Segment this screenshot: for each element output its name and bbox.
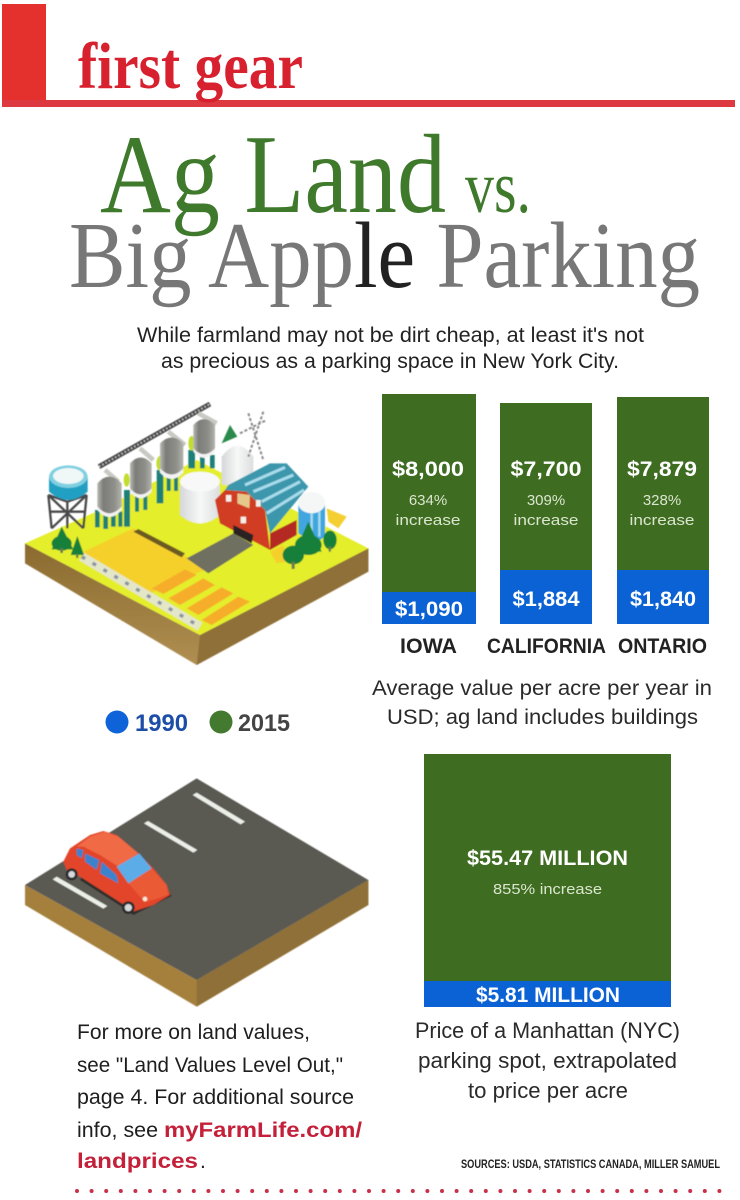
bar: Ontario: 328% [643, 492, 681, 509]
note: more on land values: landprices [77, 1150, 198, 1173]
legend item: 1990 [106, 710, 188, 737]
bar: Manhattan parking price [424, 754, 671, 1007]
intro text: While farmland may not be dirt cheap, at least it's not [137, 324, 644, 347]
legend item: 2015: 2015 [238, 710, 290, 737]
icon: communications tower [240, 412, 267, 460]
note: more on land values: info, see [77, 1119, 158, 1142]
gantry [99, 404, 210, 467]
icon: water tower [48, 465, 88, 528]
parking caption: parking spot, extrapolated [418, 1048, 677, 1073]
bar: Manhattan parking price: $5.81 MILLION [476, 984, 620, 1007]
note: more on land values: see "Land Values Level Out," [77, 1054, 343, 1077]
chart caption [372, 677, 712, 729]
note: more on land values: myFarmLife.com/ [164, 1119, 362, 1142]
bar: California: $1,884 [512, 588, 580, 611]
bar: Ontario: $7,879 [627, 458, 697, 481]
legend [106, 710, 290, 737]
bar: Iowa: 634% [409, 492, 447, 509]
illustration: parking lot with car [25, 778, 368, 1007]
note: more on land values [77, 1021, 362, 1173]
header: first gear: first gear [78, 30, 303, 103]
bar labels: ONTARIO [618, 635, 707, 658]
bar: Iowa: $1,090 [395, 598, 463, 621]
bar: Iowa [382, 394, 476, 624]
bar: California: $7,700 [510, 458, 582, 481]
icon: small blue silo [298, 492, 325, 543]
title: Big Apple Parking [69, 204, 700, 308]
parking lines [53, 793, 245, 909]
legend item: 2015 [210, 710, 290, 737]
chart caption: Average value per acre per year in [372, 677, 712, 700]
illustration: isometric farm [25, 404, 368, 665]
icon: red car [63, 831, 172, 915]
note: more on land values: For more on land values, [77, 1021, 310, 1044]
bar: Ontario: increase [630, 512, 694, 529]
parking caption: Price of a Manhattan (NYC) [415, 1018, 680, 1043]
chart caption: USD; ag land includes buildings [387, 706, 698, 729]
bar labels: IOWA [400, 635, 457, 658]
bar: Manhattan parking price: 855% increase [493, 881, 602, 898]
intro text [137, 324, 644, 373]
bar: California: 309% [527, 492, 565, 509]
title: Ag Land [100, 113, 446, 237]
icon: teal silo legs [95, 450, 215, 529]
bar: Iowa: increase [396, 512, 460, 529]
title [69, 113, 700, 308]
note: more on land values: page 4. For additional source [77, 1086, 354, 1109]
parking caption: to price per acre [468, 1078, 628, 1103]
bar: California: increase [514, 512, 578, 529]
bar labels: CALIFORNIA [487, 635, 606, 658]
bar: Ontario [617, 397, 709, 624]
bar labels [400, 635, 707, 658]
intro text: as precious as a parking space in New York City. [161, 350, 619, 373]
icon: lime highlights [124, 436, 195, 487]
note: more on land values: . [200, 1150, 206, 1173]
parking caption [415, 1018, 680, 1103]
bar chart: ag land values [382, 394, 709, 658]
legend item: 1990: 1990 [135, 710, 188, 737]
icon: grey silos [97, 419, 215, 517]
bar: Ontario: $1,840 [630, 588, 696, 611]
header: first gear [2, 4, 735, 107]
icon: white tanks [180, 446, 253, 523]
icon: red barn [215, 463, 308, 550]
bar: Manhattan parking price: $55.47 MILLION [467, 847, 628, 870]
title: vs. [465, 147, 531, 229]
bar: California [500, 403, 592, 624]
bar: Iowa: $8,000 [392, 458, 464, 481]
icon: trees [52, 522, 337, 569]
